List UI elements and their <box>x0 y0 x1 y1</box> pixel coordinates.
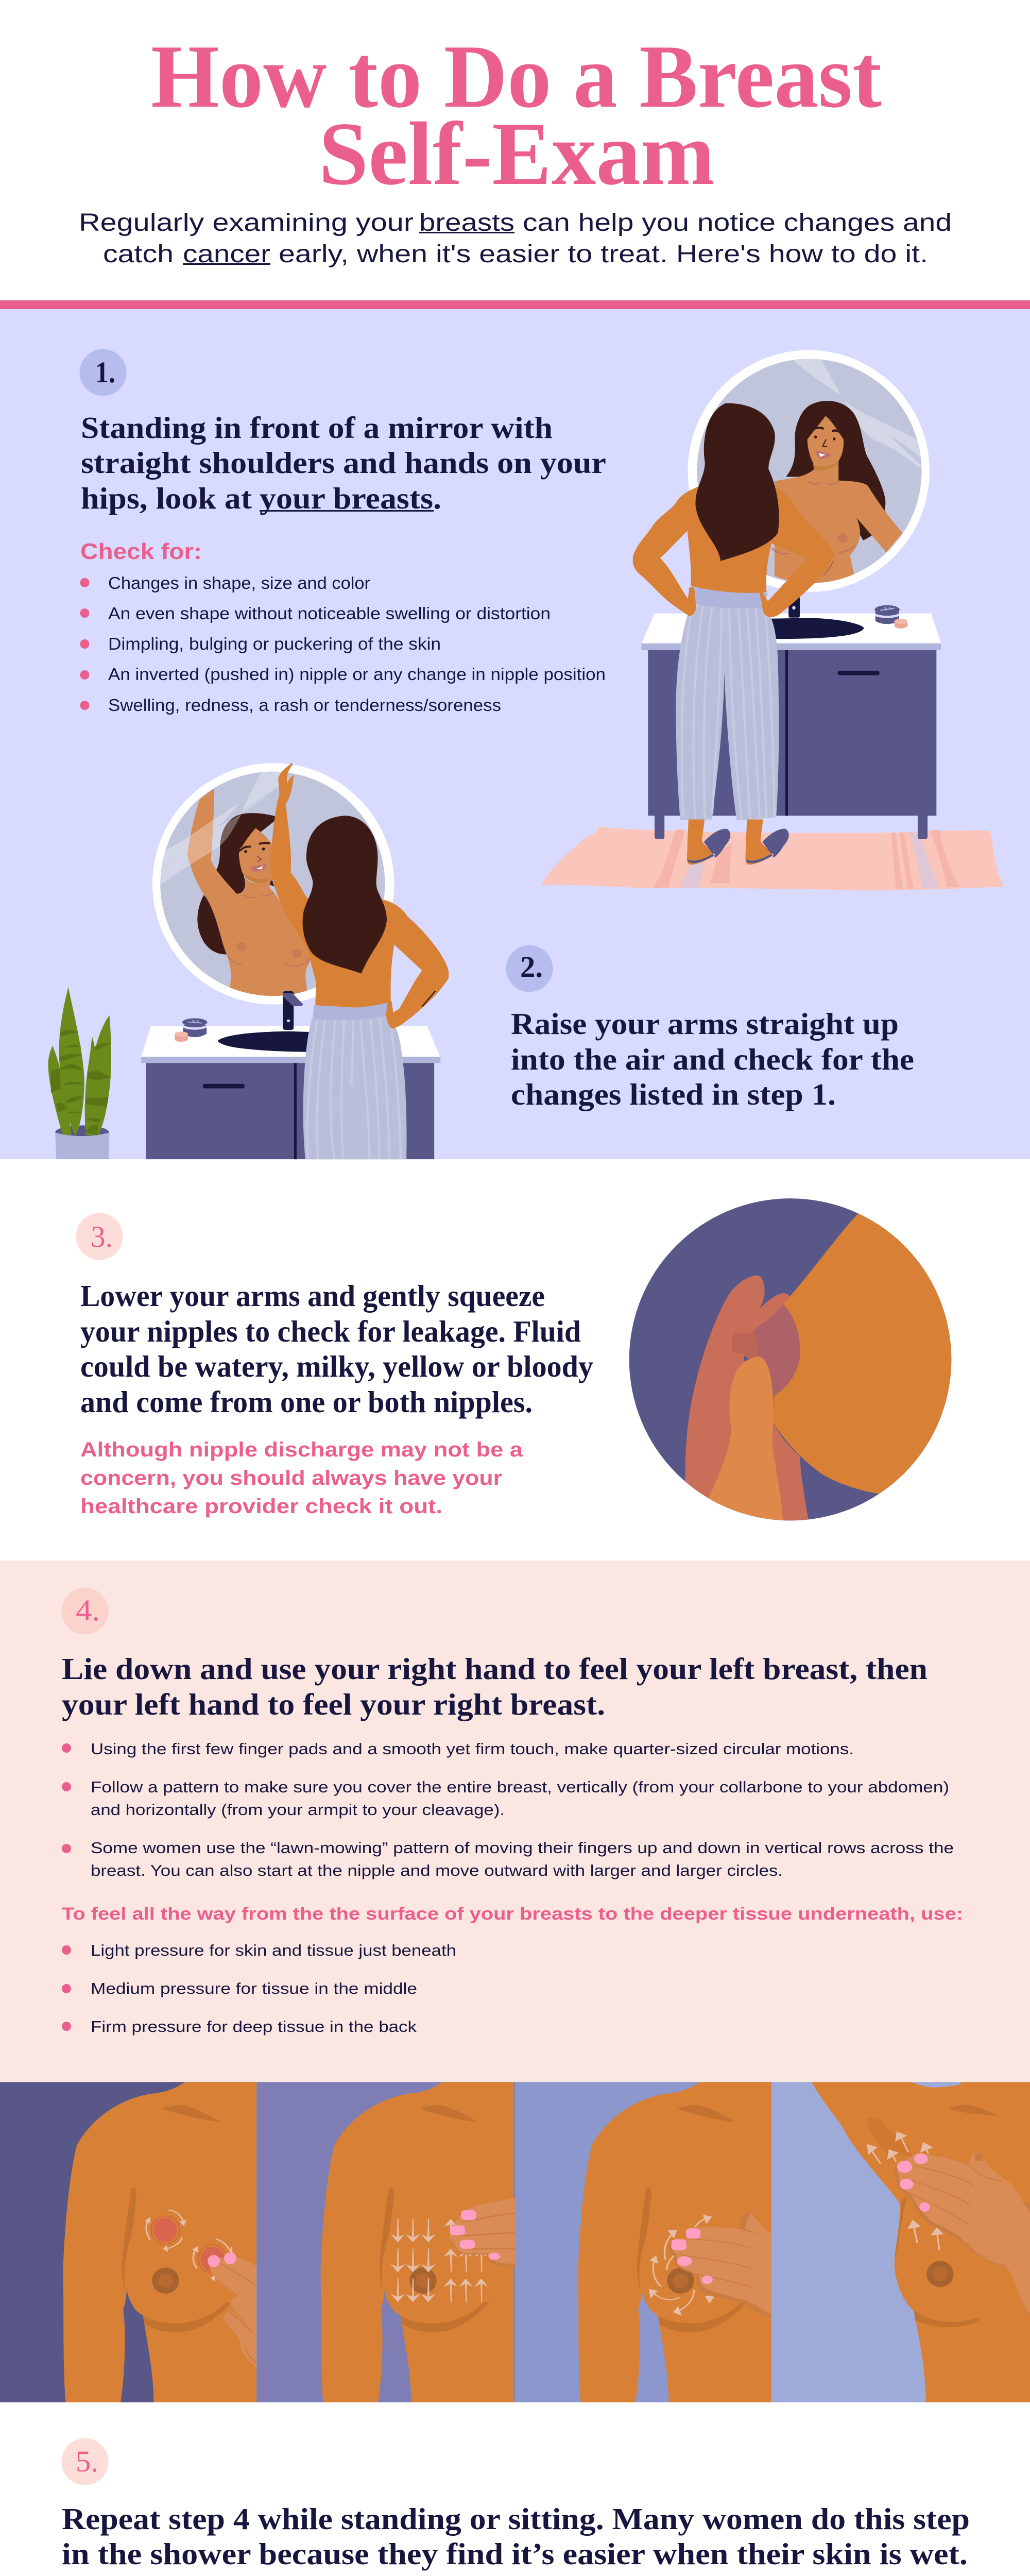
pressure list <box>62 1941 456 2036</box>
exam image 4: arm raised, toward armpit <box>771 2082 1030 2402</box>
step 2 heading: changes listed in step 1. <box>511 1077 836 1111</box>
pressure list: Light pressure for skin and tissue just beneath <box>91 1941 456 1959</box>
step 1 badge <box>79 349 127 396</box>
step 3 heading: could be watery, milky, yellow or bloody <box>80 1349 593 1383</box>
trousers <box>303 1002 406 1162</box>
step 3 heading: and come from one or both nipples. <box>80 1385 533 1419</box>
panel: step 4 <box>0 1561 1030 2082</box>
pink divider rule <box>0 300 1030 309</box>
step 4 instructions list: and horizontally (from your armpit to your cleavage). <box>91 1801 505 1819</box>
step 2 badge <box>506 945 553 992</box>
step 5 heading: Repeat step 4 while standing or sitting. Many women do this step <box>62 2502 970 2536</box>
step 1 badge: 1. <box>95 355 115 389</box>
step 4 heading: Lie down and use your right hand to feel your left breast, then <box>62 1652 928 1686</box>
step 4 badge: 4. <box>76 1594 100 1627</box>
reflection of woman <box>772 401 903 583</box>
mirror <box>152 763 394 1005</box>
panel: step 3 <box>76 1184 981 1524</box>
mirror <box>688 350 930 592</box>
step 1 heading: straight shoulders and hands on your <box>81 446 606 480</box>
trousers <box>676 587 779 820</box>
intro text <box>79 209 952 268</box>
feet and slippers <box>687 820 789 865</box>
vanity cabinet <box>141 1026 440 1162</box>
step 3 pink note: concern, you should always have your <box>80 1467 502 1489</box>
illustration: fingers squeezing nipple <box>629 1198 952 1521</box>
check for list: Changes in shape, size and color <box>108 573 370 592</box>
illustration: woman at mirror, hands on hips <box>541 350 1004 890</box>
check for list <box>80 573 606 715</box>
step 3 heading: Lower your arms and gently squeeze <box>80 1279 545 1313</box>
woman's back and arms <box>633 487 834 617</box>
intro text: cancer <box>183 241 270 268</box>
exam image 2: up and down pattern <box>256 2082 515 2402</box>
check for list: Dimpling, bulging or puckering of the skin <box>108 634 441 653</box>
step 4 instructions list: breast. You can also start at the nipple and move outward with larger and larger circles. <box>91 1861 783 1879</box>
step 1 heading: your breasts. <box>260 481 441 515</box>
step 2 badge: 2. <box>520 950 543 984</box>
pressure list: Firm pressure for deep tissue in the back <box>91 2018 417 2036</box>
woman's back and raised arm <box>271 763 449 1029</box>
cosmetic jars <box>175 1018 207 1042</box>
hair <box>303 816 387 974</box>
exam image 3: circles outward from nipple <box>515 2082 771 2402</box>
step 4 instructions list: Follow a pattern to make sure you cover the entire breast, vertically (from your collarbone to your abdomen) <box>91 1778 949 1796</box>
illustration: woman at mirror, arm raised <box>48 763 449 1162</box>
step 4 instructions list <box>62 1740 954 1879</box>
header <box>79 26 952 268</box>
check for heading: Check for: <box>80 539 202 564</box>
intro text: can help you notice changes and <box>523 209 952 236</box>
houseplant <box>48 987 111 1162</box>
check for list: An even shape without noticeable swelling or distortion <box>108 604 551 623</box>
step 3 heading: your nipples to check for leakage. Fluid <box>80 1314 581 1348</box>
step 2 heading <box>511 1007 914 1111</box>
faucet <box>283 991 303 1030</box>
check for list: An inverted (pushed in) nipple or any change in nipple position <box>108 665 606 684</box>
step 4 badge <box>62 1588 108 1634</box>
pressure list: Medium pressure for tissue in the middle <box>91 1979 417 1997</box>
step 3 badge: 3. <box>91 1220 113 1253</box>
intro text: Regularly examining your <box>79 209 414 236</box>
step 5 heading <box>62 2502 970 2571</box>
pressure subheading: To feel all the way from the the surface of your breasts to the deeper tissue underneath, use: <box>62 1904 963 1924</box>
vanity cabinet <box>642 614 941 839</box>
step 1 heading: Standing in front of a mirror with <box>81 411 553 445</box>
step 4 heading <box>62 1652 928 1721</box>
cosmetic jars <box>874 605 907 629</box>
faucet <box>788 597 800 618</box>
title: How to Do a Breast <box>151 26 882 126</box>
step 3 badge <box>76 1213 123 1260</box>
step 5 badge <box>62 2438 108 2485</box>
step 3 pink note <box>80 1438 523 1518</box>
step 3 pink note: Although nipple discharge may not be a <box>80 1438 523 1461</box>
step 2 heading: Raise your arms straight up <box>511 1007 899 1041</box>
step 1 heading <box>81 411 606 515</box>
title <box>151 26 882 204</box>
illustration strip: exam patterns <box>0 2082 1030 2402</box>
exam image 1: circular motions <box>0 2082 256 2402</box>
step 3 heading <box>80 1279 593 1419</box>
step 5 heading: in the shower because they find it’s easier when their skin is wet. <box>62 2537 968 2571</box>
check for list: Swelling, redness, a rash or tenderness/soreness <box>108 696 501 715</box>
intro text: breasts <box>419 209 514 236</box>
step 1 heading: hips, look at <box>81 481 252 515</box>
panel: step 5 <box>62 2438 970 2571</box>
step 4 instructions list: Some women use the “lawn-mowing” pattern of moving their fingers up and down in vertical rows across the <box>91 1839 954 1857</box>
hair <box>695 403 779 561</box>
step 2 heading: into the air and check for the <box>511 1042 914 1076</box>
step 4 heading: your left hand to feel your right breast. <box>62 1687 605 1721</box>
title: Self-Exam <box>319 104 715 204</box>
intro text: early, when it's easier to treat. Here's how to do it. <box>279 241 928 268</box>
step 4 instructions list: Using the first few finger pads and a smooth yet firm touch, make quarter-sized circular motions. <box>91 1740 854 1758</box>
step 3 pink note: healthcare provider check it out. <box>80 1495 442 1518</box>
panel: steps 1 and 2 <box>0 309 1030 1162</box>
intro text: catch <box>103 241 174 268</box>
reflection of woman <box>187 789 311 996</box>
step 5 badge: 5. <box>76 2445 98 2478</box>
rug <box>541 827 1004 890</box>
